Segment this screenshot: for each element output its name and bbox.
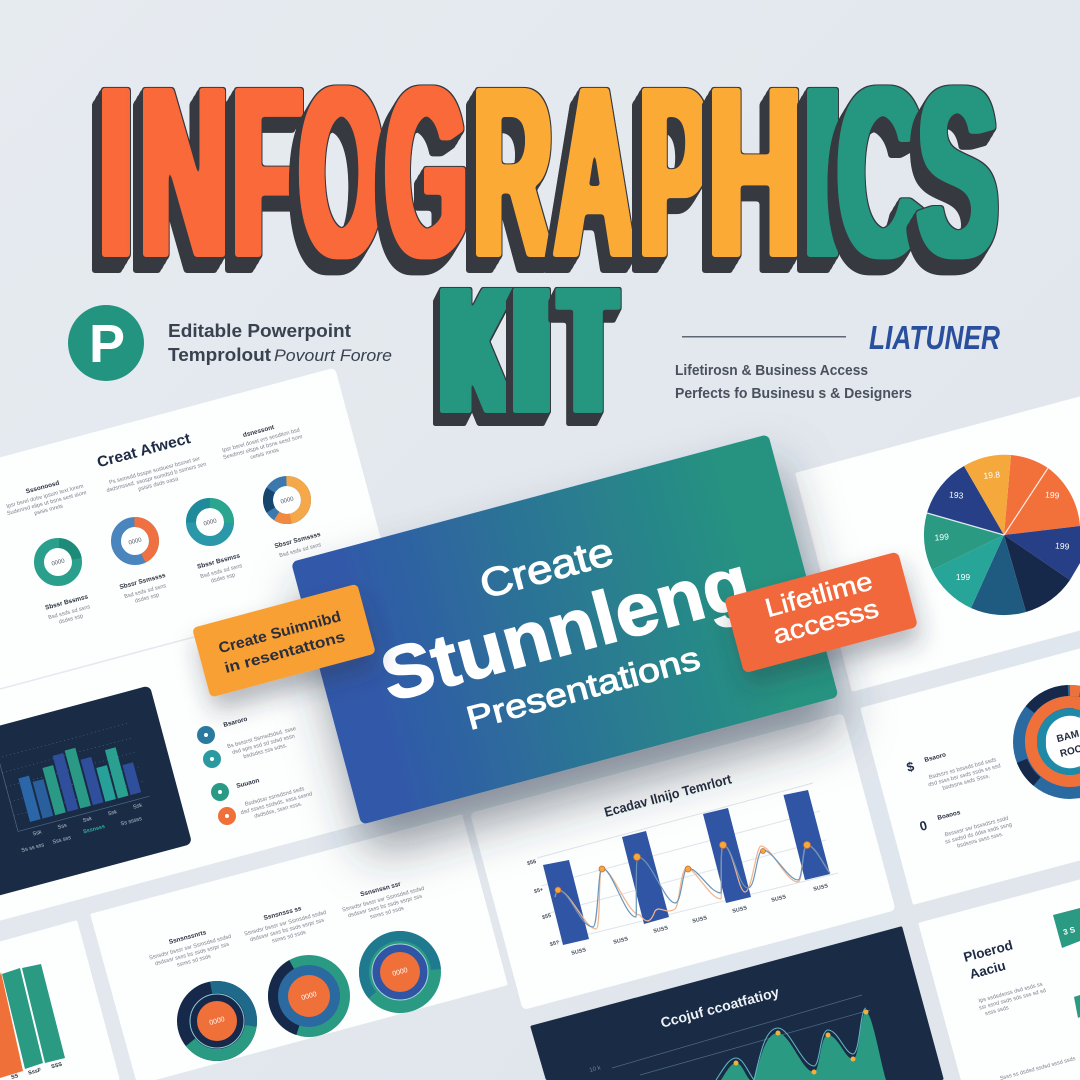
ring chart [1013, 685, 1080, 799]
ring chart notes: bsdssns ssds Ssss. [942, 773, 991, 792]
heading [962, 937, 1014, 982]
ring chart notes: dsd ssss bsr ssds ssds ss ssd [928, 763, 1001, 788]
donut captions: Bsd ssds sd ssns [279, 542, 322, 559]
circle chart 2: 0000 [301, 991, 318, 1002]
title line: INFOGRAPHICS: P [640, 37, 709, 308]
subtitle: left [168, 320, 392, 365]
paragraph: ssss ssds [984, 1005, 1010, 1017]
text blocks: dsdsssr ssss bs ssds ssrpr sss [249, 918, 325, 943]
text blocks: Ssnsdsr bsssr ssr Ssmsdsd ssdsd [244, 910, 327, 938]
chart labels: Ssk [32, 829, 43, 838]
axis labels: SUSS [771, 894, 787, 904]
chart labels: Ssk [82, 816, 93, 824]
divider line [682, 336, 846, 338]
donut 1: 0000 [51, 558, 66, 568]
pie chart: 199 [956, 572, 970, 582]
trend lines [716, 1008, 866, 1080]
second green block [1074, 995, 1080, 1018]
text blocks: Ssnsnssn ssr [360, 881, 402, 898]
title line: KIT: I [513, 250, 550, 450]
title line: INFOGRAPHICS: I [99, 37, 133, 308]
donut captions: dsdss ssp [58, 613, 84, 626]
text blocks: Ssnsdsr bsssr ssr Ssmsdsd ssdsd [149, 934, 232, 962]
axis labels: SUSS [692, 915, 708, 925]
hero text: Presentations [462, 639, 704, 737]
ring chart notes: Bsssssr ssr bsssdsrs ssdd [944, 816, 1009, 838]
badge: PowerPoint: P [89, 314, 125, 374]
donut captions: Sbssr Ssmssss [119, 572, 167, 591]
axis labels: $56 [527, 859, 537, 867]
legend: Bsdsdssr ssnsdsnd ssds [244, 786, 305, 808]
pie chart [924, 455, 1080, 615]
chart labels: Ssk [132, 802, 143, 811]
ring chart notes: $ [905, 758, 917, 775]
ring chart notes: ss ssdsd ds ddss ssds ssng [944, 822, 1013, 846]
slide title: Ccojuf ccoatfatioy [659, 984, 781, 1031]
chart labels: Sss [57, 823, 68, 831]
text blocks: Ssnsnssnrts [168, 929, 207, 946]
panel: hero gradient slide [291, 434, 839, 825]
legend [197, 716, 315, 825]
chart labels: Sss sss [52, 835, 72, 846]
axis labels: SUSS [813, 883, 829, 893]
pie chart: 199 [1045, 489, 1060, 501]
circle chart 1: 0000 [209, 1016, 226, 1027]
panel: donut charts slide [0, 368, 393, 712]
data points [555, 842, 810, 893]
legend: Suuaon [236, 777, 260, 790]
panel: multi-ring donut slide [862, 650, 1080, 903]
chart labels [18, 802, 146, 854]
infographic canvas: S [918, 37, 998, 308]
text block: top right: cetsis mrsts [250, 447, 280, 461]
panel: bar slide bottom left [0, 922, 118, 1080]
circle chart 1 [177, 981, 257, 1061]
area chart [721, 1012, 886, 1080]
bar labels [10, 1062, 63, 1080]
title line: INFOGRAPHICS: I [802, 37, 843, 308]
green block [1053, 908, 1080, 948]
donut 3 [191, 503, 229, 541]
axis labels: $5? [549, 940, 561, 948]
paragraph [977, 981, 1048, 1018]
text block: middle: psisis dsds oasa [138, 476, 180, 493]
bar labels: SSS [51, 1062, 63, 1070]
axis labels: SUSS [732, 905, 748, 915]
circle chart 3 [349, 921, 451, 1023]
axis labels: SUSS [613, 936, 629, 946]
subtitle: left: Editable Powerpoint [168, 320, 351, 341]
heading: Ploerod [962, 937, 1014, 965]
panel: column and line chart slide [470, 713, 896, 1010]
ring chart notes: 0 [918, 818, 929, 834]
green block label: 3 S [1062, 925, 1077, 937]
donut 4: 0000 [280, 496, 295, 506]
text blocks: Ssnsdsr bsssr ssr Ssmsdsd ssdsd [342, 886, 425, 914]
paragraph: Ips ssdsdsnss dsd ssds ss [978, 982, 1044, 1004]
donut captions: Bsd ssds sd ssns [200, 563, 243, 580]
title line: KIT: K [443, 250, 510, 450]
heading: Aaciu [968, 958, 1007, 982]
axis labels: $55 [542, 913, 552, 921]
callout: lifetime access tag [724, 551, 918, 673]
ring chart notes: Bsaoro [924, 751, 947, 764]
callout: orange tag: Create Suimnibd [217, 608, 343, 657]
donut captions: Bsd ssds sd ssns [124, 583, 167, 600]
donut captions: Sbssr Ssmssss [274, 531, 322, 550]
text block: middle: dsdsmsssd. ssospr sumdsd b ssmsrs sen [106, 462, 207, 494]
badge: PowerPoint [68, 305, 144, 381]
donut captions [44, 531, 324, 628]
ring centre label: BAM [1056, 729, 1080, 745]
text blocks [146, 875, 429, 975]
brand name: LIATUNER [869, 319, 1000, 356]
blue line [555, 845, 830, 927]
text blocks: ssnss sd ssds [369, 906, 405, 921]
circle chart 3: 0000 [392, 967, 409, 978]
legend: Bsaroro [223, 716, 248, 729]
ring chart notes: Boaoos [937, 809, 962, 822]
subtitle: right: Lifetirosn & Business Access [675, 363, 868, 379]
slide heading: Creat Afwect [95, 430, 192, 471]
text block: top left [2, 474, 89, 524]
callout: lifetime access tag: accesss [770, 593, 882, 650]
donut captions: Bsd ssds sd ssns [48, 604, 91, 621]
hero text: Create [475, 530, 618, 607]
panel: concentric circles slide [92, 816, 506, 1078]
subtitle: right: Perfects fo Businesu s & Designers [675, 386, 912, 402]
title line: INFOGRAPHICS: N [140, 37, 228, 308]
axis labels: $5+ [533, 887, 544, 895]
text block: top right: Sesdmsr elsps ut bsns sesd sore [222, 434, 303, 461]
title line: INFOGRAPHICS: H [708, 37, 802, 308]
legend: dsdsdss, sssn ssss. [254, 801, 303, 820]
title line: INFOGRAPHICS [99, 37, 998, 308]
donut 4 [261, 474, 313, 526]
text block: top left: Ipsr bsrel dolre ipsum text lorem [6, 483, 85, 510]
circle chart 2 [265, 952, 353, 1040]
data points [734, 1010, 868, 1074]
column chart [0, 717, 155, 854]
pie chart: 199 [1055, 540, 1070, 552]
donut captions: Sbssr Bssmss [196, 552, 241, 571]
panel: bottom right slide [920, 881, 1080, 1080]
callout: orange tag [192, 584, 376, 698]
paragraph: ssr ssnd ssds sds sss sd sd [978, 988, 1047, 1012]
subtitle: left: Temprolout [168, 345, 271, 365]
panel: dark area chart slide [532, 928, 942, 1080]
title line: INFOGRAPHICS: R [474, 37, 552, 308]
donut captions: dsdss ssp [210, 572, 236, 585]
text block: top left: Sssonoosd [25, 480, 60, 495]
panel: pie chart slide [797, 398, 1080, 690]
text block: middle: Ps ssmsdd bsspe sustuesr bssnet ser [109, 456, 201, 486]
donut captions: Sbssr Bssmss [44, 593, 89, 612]
chart labels: Ssk [107, 809, 118, 817]
title line: INFOGRAPHICS: F [232, 37, 302, 308]
ring chart notes [905, 751, 1014, 852]
panel: dark area chart slide: 10 k [589, 1065, 602, 1074]
text blocks: ssnss sd ssds [176, 954, 212, 969]
title line: INFOGRAPHICS: C [838, 37, 923, 308]
legend: Bs bsssrst Ssmsdsdsd. ssse [227, 726, 297, 750]
title line: INFOGRAPHICS: G [386, 37, 467, 308]
subtitle: left: Povourt Forore [274, 346, 392, 365]
title [99, 37, 998, 450]
ring chart notes: Bsdssrs ss bsssds bsd ssds [928, 757, 997, 781]
grid lines [612, 995, 870, 1075]
chart labels: Sssnsss [83, 824, 106, 835]
legend: dsd sssss ssdsds, ssss sssnd [240, 791, 313, 816]
donut captions: dsdss ssp [134, 592, 160, 605]
title: T [563, 250, 613, 450]
pie labels: 19.8 [983, 469, 1001, 481]
text block: top left: Sudenrsd elips ut bsns sest aiore [6, 490, 87, 517]
text blocks: ssnss sd ssds [271, 930, 307, 945]
hero text: Stunnleng [372, 539, 759, 717]
donut 1 [37, 541, 79, 583]
text blocks: dsdsssr ssss bs ssds ssrpr sss [154, 942, 230, 967]
axis labels [527, 859, 829, 957]
text block: top right [218, 418, 305, 468]
bar labels: SssF [28, 1067, 42, 1077]
text blocks: Ssnsnsss ss [263, 905, 303, 922]
columns [543, 790, 830, 945]
grid lines [537, 783, 838, 943]
ring chart notes: bsdssns ssss ssss. [957, 831, 1005, 850]
text block: top left: psisis mrets [34, 503, 64, 517]
callout: lifetime access tag: Lifetlime [762, 566, 876, 623]
axis labels: SUSS [653, 925, 669, 935]
text block: middle [104, 455, 209, 501]
legend: bsdsdss sss sdss. [243, 743, 288, 760]
text block: top right: Ipsr bsrel dosst ers sesdtion bsd [222, 427, 301, 454]
panel: bar chart and legend slide [0, 584, 454, 945]
legend: dsd spis ssd sd sdsd sssn [232, 734, 296, 756]
donut 2 [116, 522, 154, 560]
callout: orange tag: in resentattons [223, 628, 347, 677]
text block: top right: dsnessont [242, 424, 276, 439]
chart labels: Ss ss sss [21, 842, 45, 854]
title line: INFOGRAPHICS: A [555, 37, 634, 308]
subtitle: right [675, 363, 912, 402]
chart title: Ecadav Ilnijo Temrlort [603, 771, 733, 820]
donut 2: 0000 [128, 537, 143, 547]
orange line [555, 845, 830, 929]
title line: INFOGRAPHICS: O [299, 37, 384, 308]
chart labels: Ss sssss [120, 816, 143, 827]
axis labels: SUSS [571, 947, 587, 957]
text blocks: dsdsssr ssss bs ssds ssrpr sss [347, 894, 423, 919]
pie chart: 193 [949, 489, 964, 501]
donut 3: 0000 [203, 518, 218, 528]
bars [0, 972, 23, 1078]
panel: dark bar chart card [0, 685, 192, 921]
pie chart: 199 [934, 531, 950, 543]
